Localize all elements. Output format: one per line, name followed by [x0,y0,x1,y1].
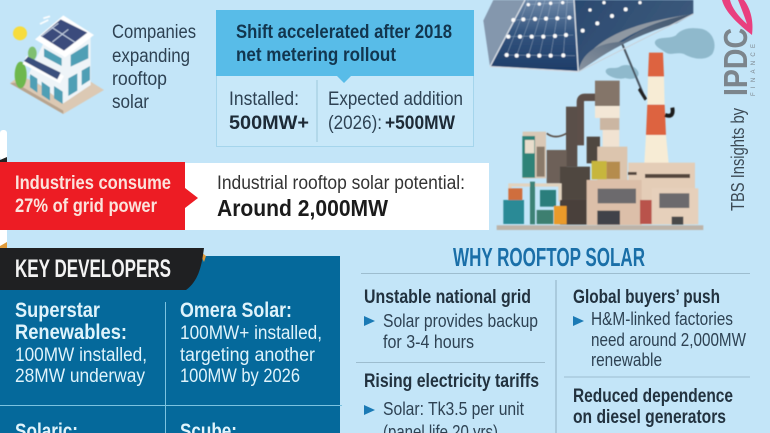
panel: net metering shift: Installed: [229,89,299,110]
heading tab: KEY DEVELOPERS [15,255,171,283]
heading: WHY ROOFTOP SOLAR [453,242,645,272]
panel: net metering shift [216,10,474,146]
reason: reduced dependence on diesel generators [573,386,733,428]
panel: net metering shift: +500MW [385,113,455,134]
developer: Omera Solar [180,299,322,387]
heading tab [0,248,206,290]
developer: Omera Solar: Omera Solar: [180,299,292,322]
developer: Omera Solar: 100MW+ installed, [180,323,322,344]
section: why rooftop solar [356,242,750,433]
reason: reduced dependence on diesel generators: Reduced dependence [573,386,733,407]
canopy panels [490,0,578,72]
reason: rising electricity tariffs [364,371,539,433]
banner: industrial potential: Industrial rooftop solar potential: [217,173,465,194]
reason: unstable national grid: for 3-4 hours [383,332,474,352]
icon: pink feather [722,0,753,35]
illustration: solar umbrella over factory [483,0,715,230]
text: companies expanding rooftop solar [112,22,196,113]
panel: net metering shift: net metering rollout [236,45,397,66]
reason: global buyers' push: Global buyers’ push [573,287,720,308]
text: companies expanding rooftop solar: rooftop [112,69,167,90]
developer: Superstar Renewables: Superstar [15,299,100,322]
factory [595,81,620,106]
panel: net metering shift: Shift accelerated after 2018 [236,22,452,43]
developer: Superstar Renewables: 100MW installed, [15,345,147,366]
reason: rising electricity tariffs: Solar: Tk3.5 per unit [383,399,524,419]
text: companies expanding rooftop solar: expanding [112,46,190,67]
developer: Superstar Renewables: 28MW underway [15,366,145,387]
reason: unstable national grid: Unstable national grid [364,287,531,308]
reason: global buyers' push: need around 2,000MW [591,330,746,350]
banner: industrial potential: Around 2,000MW [217,195,388,221]
developer: Superstar Renewables: Renewables: [15,321,127,344]
red callout [0,162,198,230]
smoke [655,28,715,59]
developer: Omera Solar: targeting another [180,345,316,366]
IPDC Finance logo: IPDC [717,28,754,96]
developer: Omera Solar: 100MW by 2026 [180,366,300,387]
developer: Superstar Renewables [15,299,147,387]
reason: rising electricity tariffs: Rising electricity tariffs [364,371,539,392]
banner: industrial potential [0,162,489,230]
white slivers at left edge [0,130,7,248]
panel: net metering shift: Expected addition [328,89,463,110]
text: companies expanding rooftop solar: solar [112,92,150,113]
reason: global buyers' push [573,287,746,370]
reason: unstable national grid: Solar provides backup [383,311,538,331]
banner: industrial potential: Industries consume [15,173,171,194]
panel: net metering shift: 500MW+ [229,113,309,134]
IPDC Finance logo: FINANCE [751,44,757,96]
banner: industrial potential: 27% of grid power [15,196,158,217]
callout band with pointer [216,10,474,83]
icon: rooftop solar house [10,15,104,114]
text: companies expanding rooftop solar: Companies [112,22,196,43]
reason: global buyers' push: H&M-linked factories [591,309,733,329]
reason: reduced dependence on diesel generators: on diesel generators [573,407,726,428]
reason: global buyers' push: renewable [591,350,662,370]
credit: TBS Insights by: TBS Insights by [728,108,748,211]
panel: net metering shift: (2026): [328,113,382,134]
panel: key developers [0,248,342,433]
reason: unstable national grid [364,287,538,352]
